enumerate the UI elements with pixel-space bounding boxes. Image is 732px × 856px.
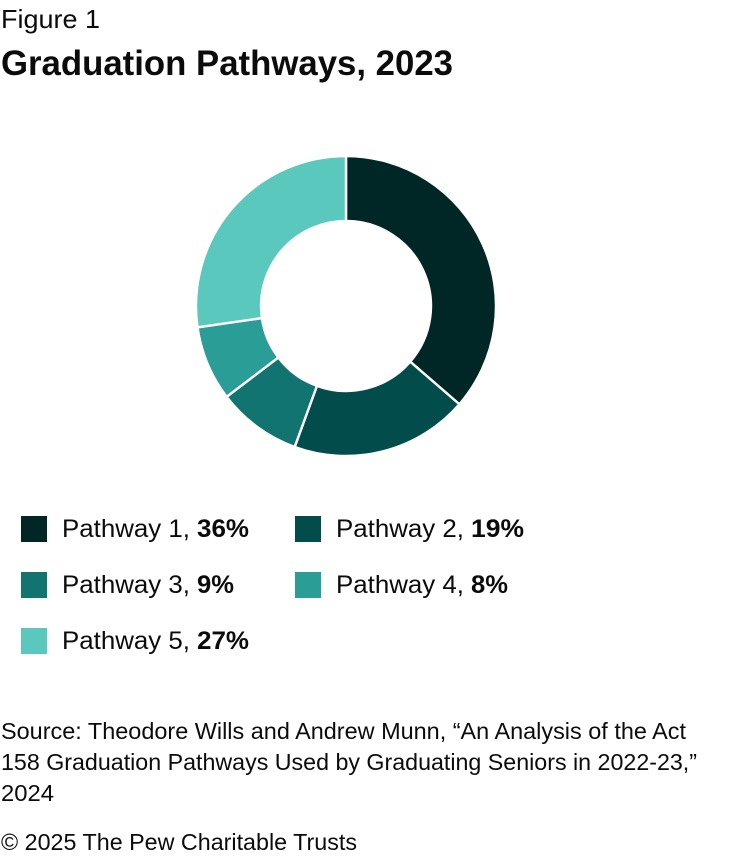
donut chart (196, 156, 496, 456)
segment: Pathway 1, 36% (346, 156, 496, 404)
legend item: Pathway 4: Pathway 4, (336, 571, 464, 599)
source note: 2024 (1, 780, 54, 806)
legend item: Pathway 1: Pathway 1, (62, 515, 190, 543)
legend item: Pathway 2 (295, 515, 524, 543)
source note: 158 Graduation Pathways Used by Graduating Seniors in 2022-23,” (1, 749, 697, 775)
legend item: Pathway 3 (21, 571, 234, 599)
legend item: Pathway 2: Pathway 2, (336, 515, 464, 543)
legend item: Pathway 1 (21, 515, 249, 543)
legend item: Pathway 3: 9% (197, 571, 234, 599)
legend item: Pathway 4: 8% (471, 571, 508, 599)
legend item: Pathway 4 (295, 571, 508, 599)
legend item: Pathway 5 (21, 627, 249, 655)
source note (1, 718, 697, 806)
legend item: Pathway 5: 27% (197, 627, 249, 655)
legend item: Pathway 2: 19% (471, 515, 524, 543)
legend (21, 515, 524, 655)
legend item: Pathway 5: Pathway 5, (62, 627, 190, 655)
copyright: © 2025 The Pew Charitable Trusts (1, 829, 357, 855)
segment: Pathway 4, 8% (198, 318, 278, 397)
legend item: Pathway 1: 36% (197, 515, 249, 543)
segment: Pathway 2, 19% (295, 362, 459, 456)
segment: Pathway 5, 27% (196, 156, 346, 327)
segment: Pathway 3, 9% (227, 357, 317, 447)
figure label: Figure 1 (1, 4, 100, 34)
source note: Source: Theodore Wills and Andrew Munn, “An Analysis of the Act (1, 718, 687, 744)
legend item: Pathway 3: Pathway 3, (62, 571, 190, 599)
title: Graduation Pathways, 2023 (1, 44, 453, 83)
